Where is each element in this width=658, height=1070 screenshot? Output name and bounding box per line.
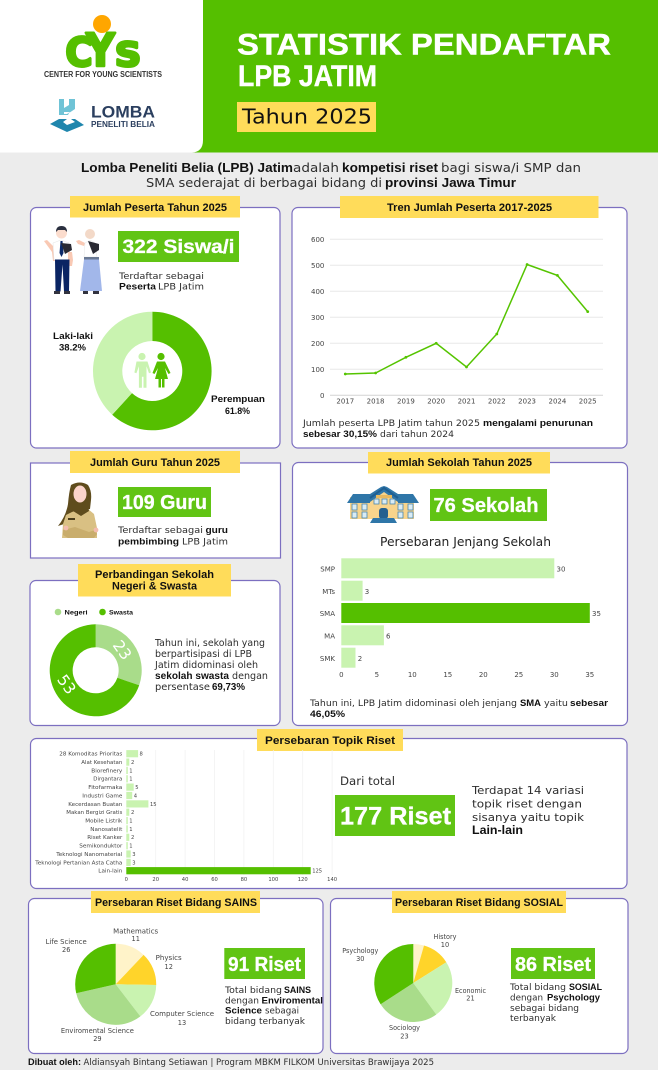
pie chart: sains — [46, 928, 214, 1043]
icon: man and woman — [134, 353, 170, 388]
text: tren description — [302, 418, 593, 440]
year badge: Tahun 2025 — [241, 104, 372, 128]
bar chart: topik riset: Mobile Listrik — [85, 818, 122, 824]
text: sains description: SAINS — [284, 985, 311, 996]
text: peserta description — [118, 272, 204, 292]
text: jenjang description: 46,05% — [310, 709, 346, 720]
bar chart: jenjang sekolah: MA — [324, 632, 335, 640]
bar chart: topik riset: Nanosatelit — [90, 827, 122, 833]
text: topik description — [471, 784, 585, 837]
bar chart: jenjang sekolah: MTs — [322, 588, 335, 596]
bar chart: topik riset: Riset Kanker — [87, 835, 123, 841]
heading: Jumlah Sekolah: Jumlah Sekolah Tahun 2025 — [386, 457, 532, 469]
intro text: provinsi Jawa Timur — [385, 175, 516, 190]
stat: 91 Riset: 91 Riset — [228, 954, 301, 976]
text: sains description — [224, 985, 323, 1027]
heading: Perbandingan Sekolah: Negeri & Swasta — [112, 580, 198, 592]
panel: Tren Jumlah Peserta — [292, 196, 627, 448]
line chart: peserta per tahun: 2017 — [336, 398, 354, 406]
text: sekolah description: Tahun ini, sekolah yang — [154, 638, 265, 649]
line chart: peserta per tahun: 200 — [311, 340, 324, 348]
stat: 177 Riset: 177 Riset — [340, 802, 452, 830]
text: sekolah description: berpartisipasi di LPB — [155, 649, 252, 660]
pie chart: sains: 12 — [165, 963, 173, 971]
heading: Tren — [340, 196, 598, 218]
text: sains description: Enviromental — [262, 996, 323, 1006]
text: sains description: sebagai — [265, 1006, 299, 1016]
stat: 322 Siswa/i: 322 Siswa/i — [122, 236, 234, 258]
line chart: peserta per tahun: 2018 — [367, 398, 385, 406]
legend: negeri swasta: Negeri — [64, 609, 88, 616]
bar chart: topik riset: 1 — [129, 777, 133, 783]
stat: 91 Riset — [224, 948, 305, 979]
heading: SAINS — [91, 891, 260, 913]
bar chart: topik riset: 8 — [140, 752, 143, 758]
bar chart: topik riset: Lain-lain — [98, 869, 122, 875]
text: sosial description: Psychology — [547, 992, 601, 1004]
line chart: peserta per tahun: 2023 — [518, 398, 536, 406]
bar chart: topik riset: 2 — [131, 810, 134, 816]
text: tren description: sebesar 30,15% — [303, 429, 378, 440]
bar chart: jenjang sekolah: 35 — [585, 671, 594, 679]
line chart: peserta per tahun — [311, 236, 603, 406]
bar chart: jenjang sekolah: 3 — [365, 588, 369, 596]
stat: 109 Guru — [118, 487, 211, 517]
panel: Jumlah Guru — [30, 451, 280, 558]
bar chart: jenjang sekolah: 0 — [339, 671, 344, 679]
panel: Persebaran Topik Riset — [30, 729, 627, 888]
donut chart: negeri vs swasta: 53 — [53, 671, 79, 698]
bar chart: topik riset: 1 — [129, 844, 133, 850]
pie chart: sains: Enviromental Science — [61, 1027, 134, 1035]
donut chart: gender — [93, 312, 212, 430]
heading: Topik Riset: Persebaran Topik Riset — [265, 735, 395, 747]
heading: Jumlah Sekolah — [368, 452, 550, 474]
donut chart: negeri vs swasta — [50, 624, 142, 716]
logo: Center for Young Scientists: C — [66, 31, 92, 76]
bar chart: topik riset: 20 — [152, 877, 159, 883]
bar chart: jenjang sekolah: SMK — [320, 655, 335, 663]
text: sosial description: terbanyak — [510, 1014, 557, 1024]
text: jenjang description: yaitu — [544, 699, 568, 709]
text: sains description: Total bidang — [224, 986, 282, 996]
logo: Center for Young Scientists: CENTER FOR YOUNG SCIENTISTS — [44, 69, 162, 79]
text: tren description: mengalami penurunan — [483, 418, 593, 429]
bar chart: topik riset: 15 — [150, 802, 157, 808]
bar chart: topik riset: 100 — [268, 877, 278, 883]
bar chart: jenjang sekolah: 2 — [358, 655, 362, 663]
bar chart: topik riset: 3 — [132, 852, 136, 858]
bar chart: topik riset: 2 — [131, 760, 134, 766]
bar chart: topik riset: 80 — [241, 877, 247, 883]
logo: Lomba Peneliti Belia: LOMBA — [91, 102, 155, 122]
text: sosial description: sebagai bidang — [510, 1004, 579, 1014]
bar chart: jenjang sekolah: 15 — [443, 671, 452, 679]
bar chart: topik riset: 4 — [134, 793, 138, 799]
pie chart: sains: Physics — [156, 954, 182, 962]
pie chart: sosial: Economic — [455, 987, 486, 995]
stat: 86 Riset — [511, 948, 595, 979]
text: jenjang description: sebesar — [570, 698, 608, 709]
panel: Jumlah Peserta — [30, 196, 280, 448]
bar chart: topik riset: Fitofarmaka — [88, 785, 122, 791]
line chart: peserta per tahun: 500 — [311, 262, 324, 270]
text: guru description: LPB Jatim — [182, 538, 228, 548]
bar chart: topik riset: 2 — [131, 835, 134, 841]
footer credit: Aldiansyah Bintang Setiawan | Program MBKM FILKOM Universitas Brawijaya 2025 — [84, 1058, 434, 1068]
text: sekolah description: persentase — [155, 682, 210, 693]
footer credit: Dibuat oleh: — [28, 1057, 81, 1067]
text: guru description — [117, 525, 228, 548]
bar chart: topik riset: Alat Kesehatan — [81, 760, 122, 766]
pie chart: sosial: Psychology — [342, 947, 378, 955]
text: sosial description — [509, 982, 602, 1024]
icon: students — [44, 226, 102, 294]
pie chart: sosial: Sociology — [389, 1024, 420, 1032]
logo: Lomba Peneliti Belia: PENELITI BELIA — [91, 120, 155, 129]
heading: SAINS: Persebaran Riset Bidang SAINS — [95, 897, 257, 909]
stat: 76 Sekolah: 76 Sekolah — [434, 495, 538, 517]
text: guru description: Terdaftar sebagai — [117, 526, 203, 536]
text: tren description: dari tahun 2024 — [380, 430, 454, 440]
bar chart: topik riset: 1 — [129, 768, 133, 774]
bar chart: topik riset: 3 — [132, 860, 136, 866]
text: peserta description: Peserta — [119, 282, 157, 292]
bar chart: jenjang sekolah: 5 — [375, 671, 379, 679]
bar chart: topik riset: 1 — [129, 818, 133, 824]
bar chart: topik riset: 120 — [298, 877, 308, 883]
text: sosial description: Total bidang — [509, 983, 566, 993]
bar chart: jenjang sekolah: 10 — [408, 671, 417, 679]
text: jenjang description: SMA — [520, 698, 541, 709]
line chart: peserta per tahun: 100 — [311, 366, 324, 374]
pie chart: sains: 26 — [62, 946, 70, 954]
title: LPB JATIM — [238, 60, 377, 93]
text: topik description: topik riset dengan — [472, 798, 582, 810]
text: sekolah description: dengan — [232, 671, 268, 682]
heading: Tren: Tren Jumlah Peserta 2017-2025 — [387, 202, 552, 214]
line chart: peserta per tahun: 2021 — [458, 398, 475, 406]
line chart: peserta per tahun: 2024 — [548, 398, 567, 406]
bar chart: topik riset: Teknologi Pertanian Asta Catha — [34, 860, 122, 866]
pie chart: sains: 13 — [178, 1019, 186, 1027]
stat: 109 Guru: 109 Guru — [122, 492, 207, 514]
text: topik description: Lain-lain — [472, 825, 523, 837]
header banner — [0, 0, 658, 152]
bar chart: jenjang sekolah: SMP — [320, 566, 335, 574]
icon: school building — [347, 486, 419, 523]
heading: Jumlah Peserta: Jumlah Peserta Tahun 2025 — [83, 202, 227, 214]
legend: negeri swasta — [55, 609, 133, 616]
panel: Perbandingan Sekolah — [30, 564, 280, 726]
intro text: Lomba Peneliti Belia (LPB) Jatim — [81, 160, 293, 175]
logo: Center for Young Scientists: Y — [85, 24, 116, 77]
bar chart: jenjang sekolah: 30 — [556, 566, 565, 574]
text: guru description: guru — [206, 525, 228, 536]
line chart: peserta per tahun: 600 — [311, 236, 324, 244]
text: peserta description: LPB Jatim — [158, 282, 204, 292]
pie chart: sosial — [342, 933, 486, 1040]
stat: 86 Riset: 86 Riset — [515, 954, 591, 976]
text: topik description: sisanya yaitu topik — [472, 811, 585, 824]
text: topik description: Terdapat 14 variasi — [471, 784, 584, 797]
intro text: SMA sederajat di berbagai bidang di — [146, 175, 382, 190]
pie chart: sains: Computer Science — [150, 1010, 214, 1018]
text: sekolah description: sekolah swasta — [155, 671, 230, 682]
text: dari total: Dari total — [340, 774, 395, 788]
heading: Topik Riset — [257, 729, 403, 751]
bar chart: jenjang sekolah: 30 — [550, 671, 559, 679]
text: tren description: Jumlah peserta LPB Jatim tahun 2025 — [302, 419, 480, 429]
bar chart: topik riset: 0 — [125, 877, 128, 883]
bar chart: topik riset: Semikonduktor — [79, 844, 123, 850]
bar chart: jenjang sekolah: 25 — [514, 671, 523, 679]
icon: teacher — [58, 482, 98, 538]
heading: SOSIAL: Persebaran Riset Bidang SOSIAL — [395, 897, 563, 909]
stat: 177 Riset — [335, 795, 455, 836]
logo: Center for Young Scientists — [44, 15, 162, 79]
text: sekolah description: Jatim didominasi oleh — [154, 660, 258, 671]
label: Laki-laki — [53, 331, 93, 354]
intro text — [81, 160, 581, 190]
bar chart: topik riset: Biorefinery — [91, 768, 122, 774]
heading: Jumlah Guru: Jumlah Guru Tahun 2025 — [90, 457, 220, 469]
label: Perempuan: 61.8% — [225, 406, 251, 417]
label: Perempuan: Perempuan — [211, 394, 265, 405]
year badge — [237, 102, 376, 132]
intro text: kompetisi riset — [342, 160, 439, 175]
line chart: peserta per tahun: 2020 — [427, 398, 445, 406]
pie chart: sosial: 21 — [466, 994, 475, 1002]
logo: Lomba Peneliti Belia — [50, 99, 155, 132]
bar chart: topik riset: 1 — [129, 827, 133, 833]
text: guru description: pembimbing — [118, 536, 179, 548]
text: sekolah description — [154, 638, 268, 693]
text: sosial description: SOSIAL — [569, 982, 602, 993]
text: sains description: dengan — [225, 996, 259, 1006]
line chart: peserta per tahun: 0 — [320, 392, 324, 400]
stat: 322 Siswa/i — [118, 231, 239, 262]
panel: Riset Bidang SAINS — [28, 891, 323, 1054]
pie chart: sosial: 30 — [356, 955, 364, 963]
legend: negeri swasta: Swasta — [109, 609, 133, 616]
pie chart: sosial: 23 — [400, 1032, 409, 1040]
line chart: peserta per tahun: 400 — [311, 288, 324, 296]
bar chart: topik riset: 40 — [182, 877, 188, 883]
bar chart: topik riset: 125 — [312, 869, 322, 875]
label: Laki-laki: 38.2% — [59, 342, 87, 354]
bar chart: topik riset: 140 — [327, 877, 337, 883]
panel: Riset Bidang SOSIAL — [330, 891, 628, 1054]
bar chart: jenjang sekolah — [320, 535, 601, 679]
title: STATISTIK PENDAFTAR — [237, 28, 611, 62]
logo: Center for Young Scientists: S — [115, 35, 141, 74]
text: jenjang description — [309, 698, 608, 720]
bar chart: jenjang sekolah: SMA — [320, 610, 335, 618]
line chart: peserta per tahun: 2019 — [397, 398, 415, 406]
heading: Perbandingan Sekolah — [78, 564, 231, 596]
bar chart: topik riset: Dirgantara — [93, 777, 122, 783]
panel: Jumlah Sekolah — [292, 452, 628, 726]
line chart: peserta per tahun: 300 — [311, 314, 324, 322]
text: sains description: bidang terbanyak — [225, 1017, 306, 1027]
text: peserta description: Terdaftar sebagai — [118, 272, 204, 282]
bar chart: topik riset — [34, 750, 337, 883]
intro text: bagi siswa/i SMP dan — [441, 160, 581, 175]
heading: Jumlah Peserta — [70, 196, 240, 218]
heading: Jumlah Guru — [70, 451, 240, 473]
text: jenjang description: Tahun ini, LPB Jatim didominasi oleh jenjang — [309, 699, 517, 709]
bar chart: topik riset: 60 — [211, 877, 218, 883]
pie chart: sosial: History — [434, 933, 457, 941]
bar chart: topik riset: Kecerdasan Buatan — [68, 802, 122, 808]
heading: SOSIAL — [392, 891, 566, 913]
pie chart: sains: 11 — [132, 935, 140, 943]
bar chart: topik riset: 5 — [135, 785, 139, 791]
donut chart: negeri vs swasta: 23 — [109, 637, 135, 664]
label: Laki-laki: Laki-laki — [53, 331, 93, 342]
bar chart: topik riset: 28 Komoditas Prioritas — [59, 752, 123, 758]
intro text: adalah — [293, 160, 339, 175]
pie chart: sains: Mathematics — [113, 928, 159, 936]
label: Perempuan — [211, 394, 265, 417]
text: sosial description: dengan — [510, 994, 543, 1004]
line chart: peserta per tahun: 2022 — [488, 398, 506, 406]
text: sekolah description: 69,73% — [212, 682, 245, 693]
pie chart: sosial: 10 — [441, 941, 449, 949]
bar chart: topik riset: Teknologi Nanomaterial — [55, 852, 122, 858]
heading: Perbandingan Sekolah: Perbandingan Sekolah — [95, 569, 214, 581]
title — [237, 28, 611, 93]
bar chart: jenjang sekolah: 6 — [386, 632, 391, 640]
text: sains description: Science — [225, 1006, 262, 1016]
line chart: peserta per tahun: 2025 — [579, 398, 597, 406]
pie chart: sains: 29 — [93, 1035, 102, 1043]
pie chart: sains: Life Science — [46, 938, 87, 946]
chart title: Persebaran Jenjang Sekolah — [380, 535, 551, 549]
bar chart: jenjang sekolah: 20 — [479, 671, 488, 679]
bar chart: jenjang sekolah: 35 — [592, 610, 601, 618]
stat: 76 Sekolah — [430, 489, 547, 521]
bar chart: topik riset: Industri Game — [82, 793, 122, 799]
bar chart: topik riset: Makan Bergizi Gratis — [66, 810, 123, 816]
